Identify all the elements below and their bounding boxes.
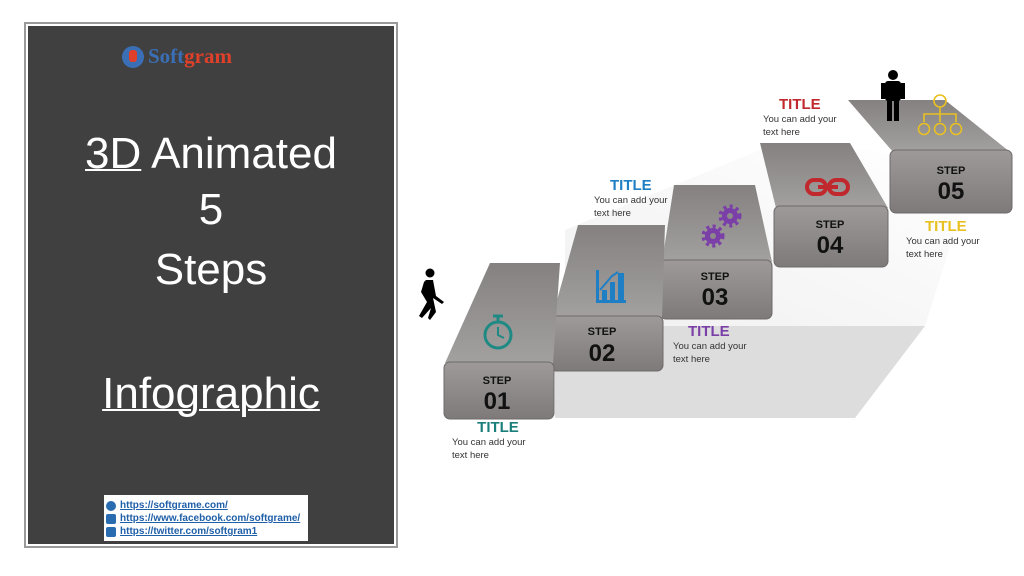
links box: https://www.facebook.com/softgrame/ [120,513,300,524]
icon: bar chart [596,270,626,303]
logo: Softgram [148,44,232,68]
callout: step 2 text [594,177,668,219]
callout: step 4 text: text here [763,127,800,138]
floor shadow [555,326,925,418]
callout: step 3 text: You can add your [673,341,747,352]
callout: step 2 text: TITLE [610,177,652,194]
callout: step 2 text: You can add your [594,195,668,206]
step 4: 04 [817,232,844,259]
step 3 [660,185,772,319]
step 4 [760,143,888,267]
callout: step 4 text: TITLE [779,96,821,113]
callout: step 1 text [452,419,526,461]
callout: step 3 text: text here [673,354,710,365]
links box: https://softgrame.com/ [120,500,228,511]
panel: title card [24,22,398,548]
callout: step 3 text: TITLE [688,323,730,340]
step 5: STEP [937,165,965,177]
heading: 5: 5 [199,185,223,234]
icon: standing person [881,70,905,121]
heading: 3D Animated: 3D Animated [85,129,337,178]
icon: stopwatch [485,316,511,348]
icon: chain link [807,180,848,194]
callout: step 3 text [673,323,747,365]
step 3: 03 [702,284,728,311]
step 4: STEP [816,219,844,231]
icon: walking person [419,268,444,320]
callout: step 1 text: text here [452,450,489,461]
links box [104,495,308,541]
step 2: STEP [588,326,616,338]
callout: step 1 text: You can add your [452,437,526,448]
callout: step 1 text: TITLE [477,419,519,436]
icon: gears [704,206,740,246]
step 2 [550,225,665,371]
callout: step 4 text [763,96,837,138]
icon: org chart [918,95,962,134]
step 1: 01 [484,388,510,415]
step 2: 02 [589,340,615,367]
step 1 [444,263,560,419]
callout: step 5 text: You can add your [906,236,980,247]
step 1: STEP [483,375,511,387]
heading: Steps: Steps [155,245,267,294]
callout: step 5 text: TITLE [925,218,967,235]
callout: step 5 text [906,218,980,260]
links box: https://twitter.com/softgram1 [120,526,257,537]
callout: step 4 text: You can add your [763,114,837,125]
step 3: STEP [701,271,729,283]
callout: step 5 text: text here [906,249,943,260]
step 5: 05 [938,178,964,205]
heading: Infographic: Infographic [102,369,320,418]
step 5 [848,100,1012,213]
callout: step 2 text: text here [594,208,631,219]
